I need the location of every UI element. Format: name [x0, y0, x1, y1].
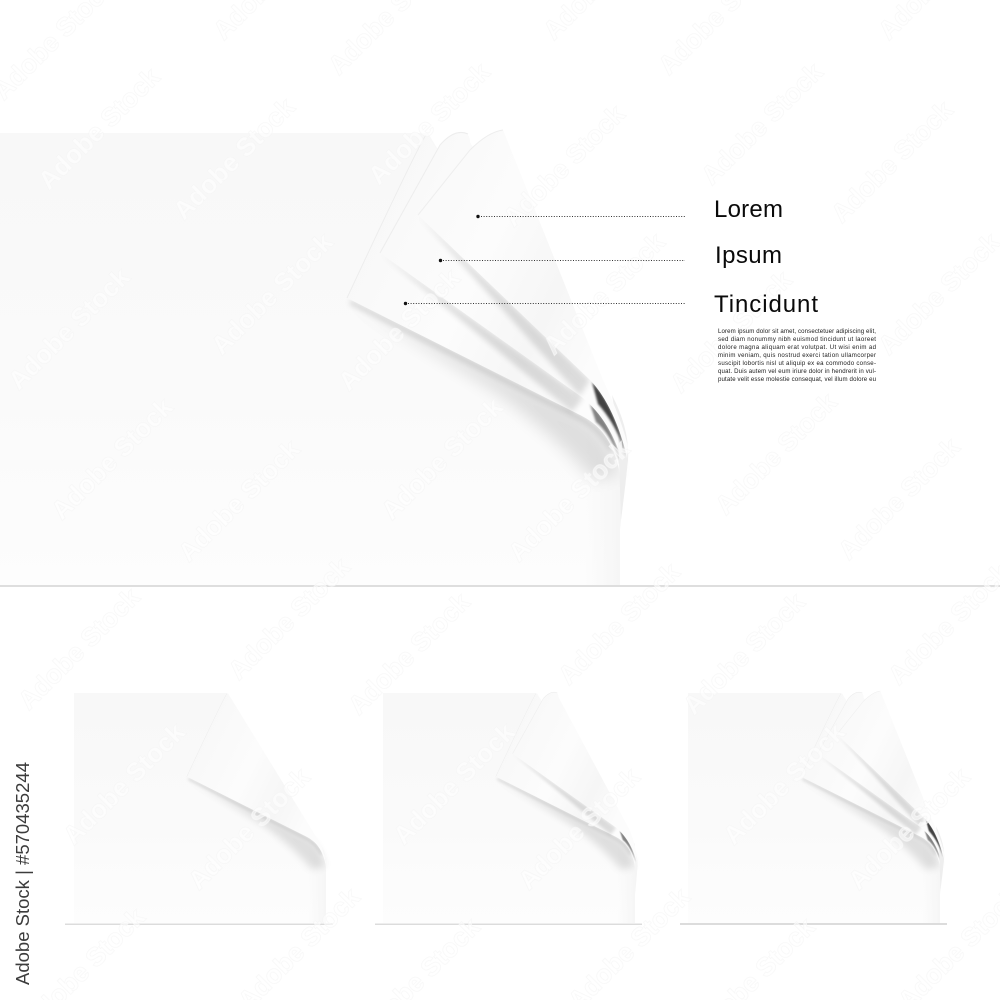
small baseline 2 — [375, 924, 642, 925]
paragraph: sed diam nonummy nibh euismod tincidunt ut laoreet — [718, 336, 876, 343]
watermark pattern: Adobe Stock — [57, 716, 191, 850]
watermark pattern: Adobe Stock — [375, 391, 509, 525]
main baseline — [0, 585, 1000, 587]
watermark pattern: Adobe Stock — [497, 98, 631, 232]
watermark pattern: Adobe Stock — [32, 61, 166, 195]
watermark pattern: Adobe Stock — [695, 56, 829, 190]
watermark pattern: Adobe Stock — [167, 91, 301, 225]
main curled paper illustration — [0, 130, 628, 585]
watermark pattern: Adobe Stock — [677, 586, 811, 720]
leader: Ipsum — [439, 259, 685, 262]
watermark pattern: Adobe Stock — [342, 586, 476, 720]
watermark pattern: Adobe Stock — [552, 556, 686, 690]
small paper: two folds — [383, 692, 638, 923]
watermark pattern: Adobe Stock — [332, 262, 466, 396]
small paper: three folds — [688, 691, 944, 923]
watermark pattern: Adobe Stock — [45, 391, 179, 525]
paragraph: suscipit lobortis nisl ut aliquip ex ea commodo conse- — [718, 360, 876, 367]
paragraph — [718, 328, 876, 383]
watermark pattern: Adobe Stock — [2, 261, 136, 395]
small paper: single fold — [74, 693, 327, 923]
heading: Tincidunt: Tincidunt — [714, 291, 818, 318]
watermark pattern: Adobe Stock — [172, 433, 306, 567]
heading: Lorem: Lorem — [714, 196, 783, 223]
paragraph: dolore magna aliquam erat volutpat. Ut wisi enim ad — [718, 344, 876, 351]
watermark pattern: Adobe Stock — [832, 431, 966, 565]
small baseline 1 — [65, 924, 333, 925]
watermark pattern: Adobe Stock — [502, 433, 636, 567]
paragraph: quat. Duis autem vel eum iriure dolor in hendrerit in vul- — [718, 368, 876, 375]
watermark pattern: Adobe Stock — [664, 264, 798, 398]
watermark pattern: Adobe Stock — [182, 761, 316, 895]
paragraph: minim veniam, quis nostrud exerci tation ullamcorper — [718, 352, 876, 359]
paragraph: Lorem ipsum dolor sit amet, consectetuer adipiscing elit, — [718, 328, 876, 335]
watermark pattern: Adobe Stock — [222, 551, 356, 685]
watermark pattern: Adobe Stock — [205, 226, 339, 360]
watermark pattern: Adobe Stock — [537, 226, 671, 360]
heading: Ipsum: Ipsum — [715, 242, 782, 269]
watermark pattern: Adobe Stock — [362, 56, 496, 190]
watermark pattern: Adobe Stock — [709, 386, 843, 520]
watermark pattern: Adobe Stock — [12, 581, 146, 715]
watermark pattern: Adobe Stock — [387, 716, 521, 850]
small baseline 3 — [680, 923, 947, 925]
leader: Tincidunt — [404, 302, 685, 305]
watermark pattern: Adobe Stock — [512, 761, 646, 895]
leader: Lorem — [476, 215, 685, 218]
watermark pattern: Adobe Stock — [842, 761, 976, 895]
vertical stock id: Adobe Stock | #570435244 — [12, 762, 33, 985]
watermark pattern: Adobe Stock — [717, 716, 851, 850]
watermark pattern: Adobe Stock — [825, 94, 959, 228]
paragraph: putate velit esse molestie consequat, vel illum dolore eu — [718, 376, 876, 383]
